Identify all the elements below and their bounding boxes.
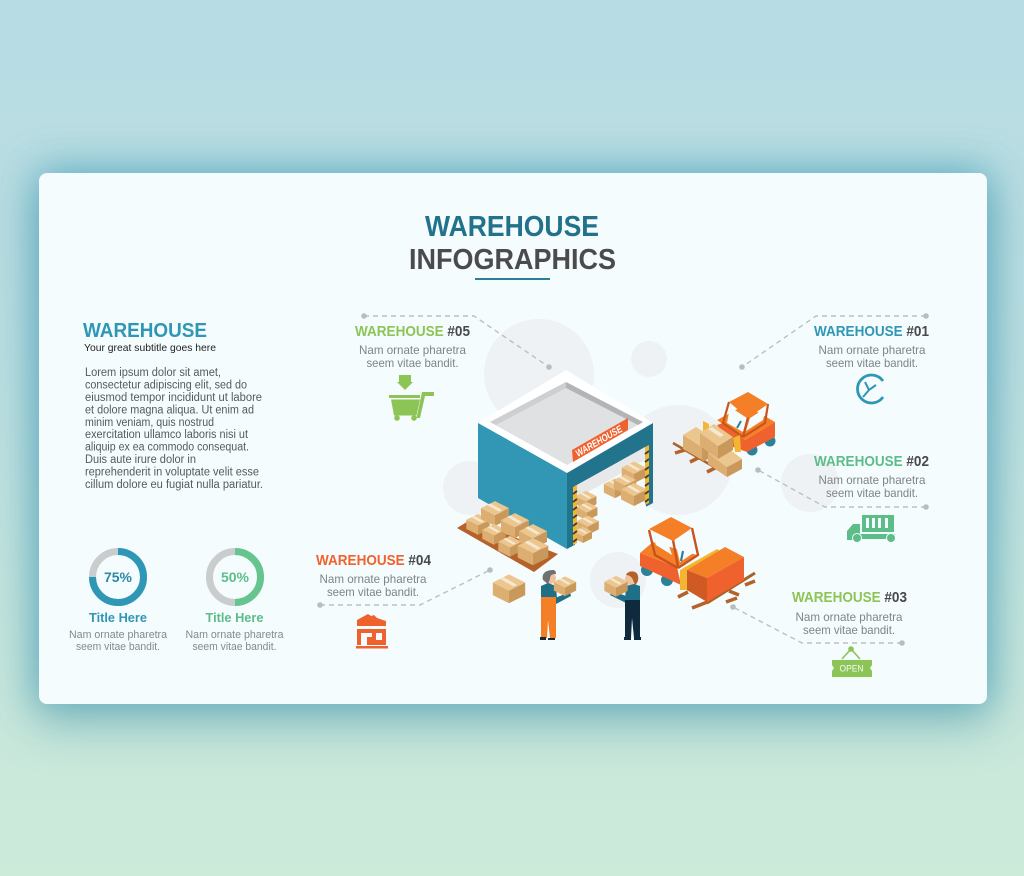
left text block: Your great subtitle goes here (84, 342, 216, 354)
callout 04: seem vitae bandit. (327, 585, 419, 599)
body (640, 553, 681, 585)
loose box (493, 574, 525, 603)
callout 02: Nam ornate pharetra (818, 473, 926, 487)
callout 02: WAREHOUSE #02 (814, 453, 929, 470)
callout 04: WAREHOUSE #04 (316, 552, 432, 569)
windows and frame (652, 533, 672, 555)
left text block: consectetur adipiscing elit, sed do (85, 380, 247, 392)
left text block: minim veniam, quis nostrud (85, 417, 214, 429)
icon: clock (858, 375, 883, 403)
donut 50%: 50% (221, 569, 250, 585)
pallet (673, 443, 728, 475)
left text block: et dolore magna aliqua. Ut enim ad (85, 404, 254, 416)
callout 03: Nam ornate pharetra (796, 610, 903, 624)
left text block: cillum dolore eu fugiat nulla pariatur. (85, 479, 263, 491)
callout 01: WAREHOUSE #01 (814, 323, 929, 340)
box front (708, 453, 727, 477)
callout 02 (755, 453, 929, 542)
load pallet (707, 573, 755, 603)
donut 50%: Nam ornate pharetra (186, 629, 284, 641)
icon: open sign (832, 646, 872, 677)
donut 50%: Title Here (206, 611, 264, 625)
donut 50% (186, 552, 284, 653)
right wall (567, 423, 653, 549)
left text block: eiusmod tempor incididunt ut labore (85, 392, 262, 404)
background circles (443, 319, 839, 608)
callout 05 (355, 313, 552, 421)
icon: open sign: OPEN (840, 664, 864, 674)
callout 01: Nam ornate pharetra (818, 343, 926, 357)
icon: truck (847, 515, 896, 542)
forklift top right (673, 392, 776, 477)
box top (700, 433, 718, 459)
callout 03: seem vitae bandit. (803, 623, 895, 637)
callout 02: seem vitae bandit. (826, 486, 918, 500)
donut 75%: seem vitae bandit. (76, 641, 160, 653)
left text block: Lorem ipsum dolor sit amet, (85, 367, 221, 379)
box back (683, 435, 702, 460)
callout 03 (730, 589, 907, 677)
left text block: WAREHOUSE (83, 320, 207, 342)
body (717, 422, 775, 452)
donut 75%: Nam ornate pharetra (69, 629, 168, 641)
door opening (575, 447, 646, 550)
sign: WAREHOUSE (574, 424, 625, 460)
slide card (39, 173, 987, 704)
worker navy (604, 571, 641, 640)
callout 01: seem vitae bandit. (826, 356, 918, 370)
donut 50%: seem vitae bandit. (192, 641, 276, 653)
donut 75%: 75% (104, 569, 133, 585)
left text block: exercitation ullamco laboris nisi ut (85, 429, 249, 441)
callout 05: Nam ornate pharetra (359, 343, 466, 357)
roof (478, 370, 653, 473)
boxes inside door (604, 478, 626, 498)
title (409, 211, 616, 280)
donut 75%: Title Here (89, 611, 147, 625)
left wall (478, 423, 567, 549)
hazard stripes (573, 485, 577, 545)
callout 04: Nam ornate pharetra (320, 572, 427, 586)
left text block: aliquip ex ea commodo consequat. (85, 442, 249, 454)
load (687, 547, 744, 578)
callout 05: WAREHOUSE #05 (355, 323, 470, 340)
worker orange (540, 570, 576, 640)
icon: shopping cart (389, 375, 434, 421)
callout 03: WAREHOUSE #03 (792, 589, 907, 606)
left text block (83, 320, 263, 491)
donut 75% (69, 552, 168, 653)
callout 05: seem vitae bandit. (366, 356, 458, 370)
pallet with boxes (457, 501, 558, 572)
callout 04 (316, 552, 493, 648)
mast (680, 549, 722, 590)
left text block: Duis aute irure dolor in (85, 454, 196, 466)
windows and frame (727, 407, 747, 432)
callout 01 (739, 313, 929, 403)
left text block: reprehenderit in voluptate velit esse (85, 466, 259, 478)
title: WAREHOUSE (425, 211, 599, 243)
icon: house (356, 614, 388, 648)
forklift bottom right (640, 517, 755, 608)
warehouse building (478, 370, 653, 550)
title: INFOGRAPHICS (409, 244, 616, 276)
